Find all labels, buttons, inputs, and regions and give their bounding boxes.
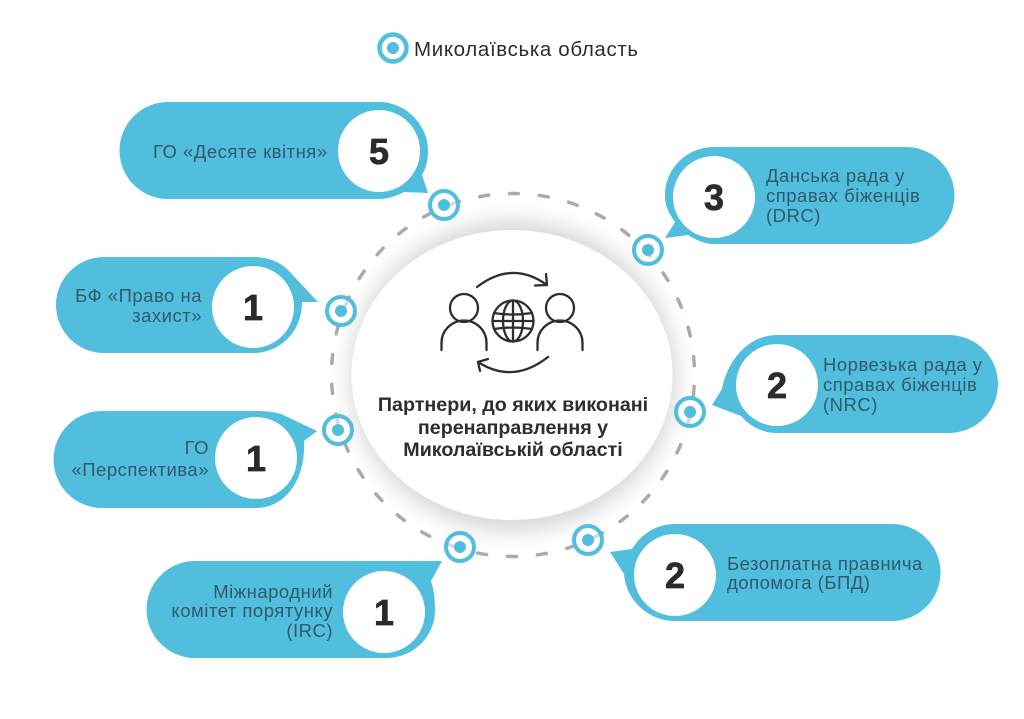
panel: ГО Перспектива: 1 xyxy=(246,438,266,479)
heading: Миколаївській області xyxy=(403,439,623,461)
panel: Безоплатна правнича допомога: 2 xyxy=(665,555,685,596)
panel: ГО Перспектива xyxy=(53,411,317,508)
panel: Данська рада: (DRC) xyxy=(766,205,821,226)
panel: БФ Право на захист: захист» xyxy=(132,305,202,326)
panel: Данська рада: 3 xyxy=(704,177,724,218)
panel: Безоплатна правнича допомога: допомога (БПД) xyxy=(727,572,870,593)
panel: Данська рада: Данська рада у xyxy=(766,165,905,186)
panel: Норвезька рада xyxy=(712,335,998,433)
panel: Безоплатна правнича допомога: Безоплатна правнича xyxy=(727,553,923,574)
icon: people, globe and arrows xyxy=(442,273,582,372)
markers on the ring xyxy=(324,191,704,561)
panel: Норвезька рада: 2 xyxy=(767,365,787,406)
panel: ГО Десяте квітня xyxy=(120,102,428,199)
panel: Безоплатна правнича допомога xyxy=(610,524,940,621)
panel: Норвезька рада: Норвезька рада у xyxy=(823,354,983,375)
panel: БФ Право на захист xyxy=(56,257,318,353)
heading: перенаправлення у xyxy=(418,417,608,439)
central circle xyxy=(349,220,677,532)
panel: ГО Десяте квітня: 5 xyxy=(369,131,389,172)
panel: Міжнародний комітет порятунку: 1 xyxy=(374,592,394,633)
panel: Міжнародний комітет порятунку: Міжнародний xyxy=(213,581,333,602)
legend: Миколаївська область xyxy=(414,38,639,61)
panel: Данська рада xyxy=(665,147,954,244)
panel: ГО Перспектива: ГО xyxy=(185,437,209,458)
panel: Міжнародний комітет порятунку: (IRC) xyxy=(286,620,333,641)
panel: БФ Право на захист: 1 xyxy=(243,287,263,328)
panel: Норвезька рада: (NRC) xyxy=(823,394,878,415)
heading: Партнери, до яких виконані xyxy=(378,394,648,416)
panel: ГО Десяте квітня: ГО «Десяте квітня» xyxy=(153,141,328,162)
panel: Данська рада: справах біженців xyxy=(766,185,920,206)
panel: БФ Право на захист: БФ «Право на xyxy=(75,285,202,306)
panel: Норвезька рада: справах біженців xyxy=(823,374,977,395)
panel: Міжнародний комітет порятунку xyxy=(146,561,442,658)
panel: Міжнародний комітет порятунку: комітет порятунку xyxy=(171,600,333,621)
dashed ring xyxy=(332,194,694,556)
panel: ГО Перспектива: «Перспектива» xyxy=(71,459,209,480)
